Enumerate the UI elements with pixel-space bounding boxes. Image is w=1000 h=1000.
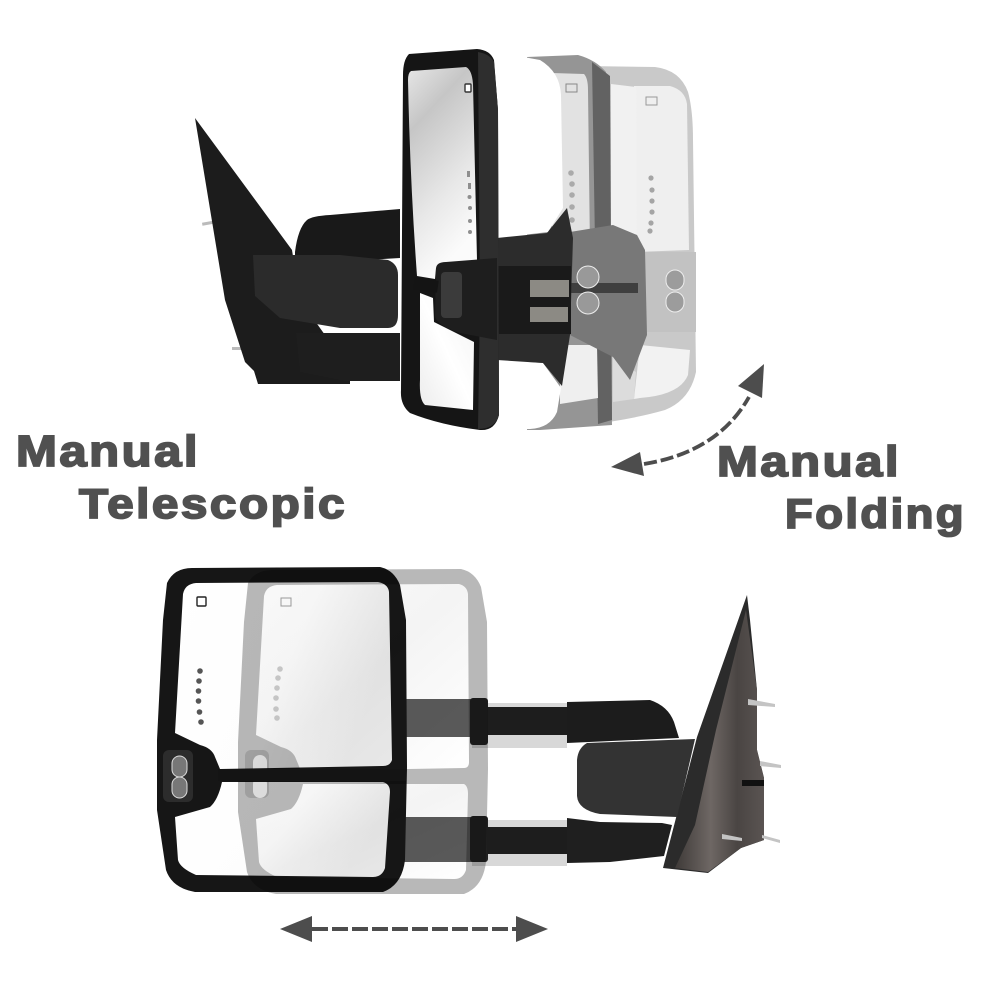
- telescopic tubes: [470, 698, 569, 862]
- defrost icon: [465, 84, 471, 92]
- white housing: [490, 52, 563, 430]
- upper support arm: [295, 209, 400, 262]
- label: Manual Folding: Folding: [785, 490, 966, 537]
- label: Manual Telescopic: Manual: [16, 427, 200, 476]
- centre pivot housing: [577, 739, 695, 817]
- label: Manual Telescopic: Telescopic: [79, 480, 347, 527]
- dark centre housing: [497, 208, 573, 386]
- horizontal divider bar: [413, 277, 439, 293]
- lower glass: [420, 293, 474, 410]
- label: Manual Folding: [717, 438, 966, 537]
- ghost mirror: middle folded position: [527, 55, 647, 430]
- main mirror head: [157, 567, 407, 892]
- ghost mirror: furthest folded position: [585, 66, 696, 425]
- lamp window: [441, 272, 462, 318]
- lamp housing: [163, 750, 193, 802]
- bottom mirror: manual telescopic view: [157, 567, 781, 894]
- upper sleeve arm: [567, 700, 679, 743]
- turn signal lamps: [530, 280, 569, 322]
- mount base: [663, 595, 781, 873]
- mount base with studs: [195, 118, 350, 384]
- lower sleeve arm: [567, 818, 672, 863]
- centre pivot housing: [253, 255, 398, 328]
- arrow: curved folding double arrow: [611, 364, 764, 476]
- lower glass: [175, 782, 390, 877]
- top mirror: manual folding view: [195, 49, 696, 430]
- upper glass: [408, 67, 477, 279]
- frame textured band: [478, 52, 499, 429]
- signal dots: [196, 668, 204, 725]
- mount studs: [722, 699, 781, 843]
- glass signal dots: [467, 171, 472, 234]
- black mirror frame: [401, 49, 499, 430]
- arrow: straight telescopic double arrow: [280, 916, 548, 942]
- label: Manual Folding: Manual: [717, 438, 901, 486]
- upper glass: [175, 582, 392, 769]
- ghost extension arms: [403, 699, 567, 866]
- mirror divider bar: [218, 769, 406, 781]
- ghost mirror overlay: [238, 569, 488, 894]
- label: Manual Telescopic: [16, 427, 347, 527]
- puddle lamp bracket: [435, 258, 497, 340]
- mirror head: [401, 49, 573, 430]
- defrost icon: [197, 597, 206, 606]
- lower support arm: [296, 333, 400, 381]
- dark centre window: [497, 266, 571, 334]
- black frame: [157, 567, 407, 892]
